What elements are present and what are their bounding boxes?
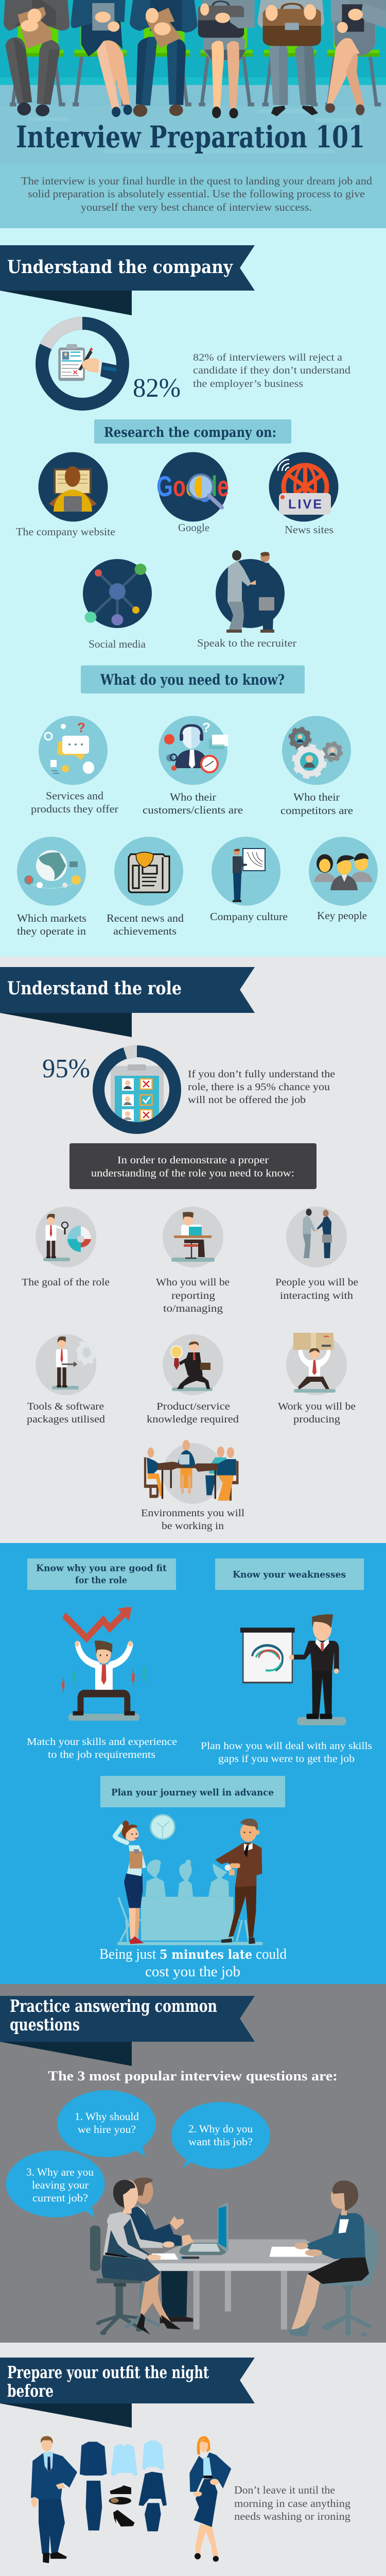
tip text: needs washing or ironing: [234, 2510, 351, 2522]
callout: five minutes late: [99, 1946, 287, 1980]
stat description: [193, 352, 350, 389]
speech bubble: question 1: we hire you?: [78, 2123, 136, 2136]
research item: news sites: [269, 452, 339, 536]
women's jacket: [138, 2472, 167, 2506]
stat: 82%: 82%: [133, 374, 181, 403]
knowledge item: customers and clients: customers/clients are: [143, 804, 243, 816]
research item: social media: Social media: [89, 638, 146, 650]
role item: environments: [141, 1440, 244, 1532]
man in suit: [31, 2436, 77, 2563]
skirt: [145, 2503, 161, 2531]
role item: who you report to: reporting: [171, 1290, 215, 1301]
callout: five minutes late: Being just 5 minutes late could: [99, 1946, 287, 1962]
trousers: [86, 2481, 102, 2531]
icon: handshake: [303, 1209, 332, 1258]
banner heading: practice answering: [0, 1996, 255, 2066]
knowledge item: services and products: [31, 716, 118, 815]
donut chart: 95%: [99, 1051, 175, 1128]
icon: candidate checklist: [111, 1064, 164, 1128]
panel: prepare your outfit: [0, 2343, 386, 2576]
stat description: will not be offered the job: [188, 1094, 306, 1106]
men's shoes: [109, 2485, 131, 2504]
tip text: skills gaps: gaps if you were to get the job: [218, 1753, 355, 1765]
knowledge item: company culture: [210, 837, 288, 923]
stat: 95%: 95%: [42, 1054, 90, 1083]
research item: the company website: [16, 452, 115, 538]
stat description: role, there is a 95% chance you: [188, 1081, 330, 1093]
role item: who you report to: to/managing: [163, 1303, 223, 1314]
shirt one: [111, 2444, 137, 2476]
illustration: man presenting chart: [240, 1614, 346, 1725]
banner heading: understand the company: Understand the company: [7, 257, 233, 278]
illustration: late for interview: [115, 1815, 263, 1945]
heading: research the company on: Research the company on:: [104, 425, 276, 440]
panel: intro: [0, 164, 386, 228]
role item: tools and software: packages utilised: [27, 1414, 105, 1425]
callout box: In order to demonstrate a proper: [117, 1155, 269, 1166]
donut chart: 82%: [42, 324, 122, 404]
banner heading: understand the role: [0, 967, 255, 1037]
illustration: business outfits: [31, 2436, 231, 2563]
role item: work you will produce: Work you will be: [278, 1401, 356, 1412]
speech bubble: question 2: want this job?: [188, 2136, 253, 2148]
knowledge item: customers and clients: [143, 716, 243, 816]
banner heading: prepare your outfit: Prepare your outfit the night: [7, 2362, 209, 2382]
role item: environments: be working in: [162, 1520, 224, 1532]
role item: tools and software: [27, 1334, 105, 1425]
banner heading: prepare your outfit: [0, 2358, 255, 2428]
heading: what do you need to know: What do you need to know?: [100, 671, 285, 688]
illustration: interview at table: [90, 2178, 378, 2336]
jacket: [80, 2442, 107, 2476]
role item: work you will produce: [278, 1333, 356, 1425]
icon: clipboard and hand: [58, 344, 117, 381]
role item: product and service knowledge: knowledge required: [147, 1414, 239, 1425]
heading: research the company on: [94, 419, 291, 444]
tip text: Don’t leave it until the: [234, 2484, 335, 2496]
knowledge item: recent news: [107, 837, 184, 937]
research item: social media: [83, 559, 152, 650]
stat description: candidate if they don’t understand: [193, 365, 350, 376]
knowledge item: recent news: Recent news and: [107, 912, 184, 924]
speech bubble: question 3: leaving your: [32, 2179, 89, 2191]
knowledge item: markets: [17, 837, 86, 937]
role item: product and service knowledge: Product/service: [156, 1401, 230, 1412]
illustration: six candidates seated on chairs: [4, 0, 386, 118]
panel: preparation tips: [0, 1543, 386, 1984]
role item: environments: Environments you will: [141, 1507, 244, 1519]
role item: the goal of the role: The goal of the role: [22, 1277, 110, 1288]
role item: tools and software: Tools & software: [27, 1401, 104, 1412]
intro text: yourself the very best chance of interview success.: [81, 201, 312, 213]
role item: people you will interact with: [275, 1207, 358, 1301]
knowledge item: key people: [309, 837, 378, 922]
research item: google: [156, 452, 229, 534]
research item: news sites: News sites: [285, 523, 334, 536]
knowledge item: competitors: competitors are: [280, 804, 353, 817]
intro text: [21, 175, 373, 213]
stat description: the employer’s business: [193, 378, 303, 389]
knowledge item: services and products: Services and: [46, 789, 104, 802]
tip text: match skills: Match your skills and experience: [27, 1736, 177, 1748]
knowledge item: recent news: achievements: [113, 925, 177, 937]
research item: speak to the recruiter: Speak to the recruiter: [197, 637, 296, 649]
knowledge item: competitors: Who their: [293, 791, 340, 803]
role item: the goal of the role: [22, 1207, 110, 1288]
knowledge item: services and products: ?: [77, 720, 85, 735]
role item: who you report to: Who you will be: [156, 1277, 230, 1288]
knowledge item: markets: Which markets: [17, 912, 86, 924]
tip text: morning in case anything: [234, 2497, 351, 2510]
tip text: skills gaps: [201, 1740, 372, 1765]
role item: work you will produce: producing: [293, 1414, 340, 1425]
speech bubble: question 3: current job?: [32, 2192, 88, 2204]
knowledge item: customers and clients: ?: [202, 720, 210, 735]
role item: who you report to: [156, 1207, 230, 1314]
research item: speak to the recruiter: [197, 550, 296, 649]
research item: the company website: The company website: [16, 526, 115, 538]
woman in suit: [189, 2436, 231, 2562]
stat description: If you don’t fully understand the: [188, 1069, 335, 1080]
panel: understand the company: [0, 228, 386, 957]
role item: product and service knowledge: [147, 1334, 239, 1425]
banner heading: understand the company: [0, 245, 255, 315]
panel: hero: [0, 0, 386, 165]
heading: three most popular questions: The 3 most popular interview questions are:: [48, 2069, 338, 2083]
tip text: [234, 2484, 351, 2522]
speech bubble: question 1: [57, 2090, 156, 2157]
knowledge item: customers and clients: Who their: [170, 791, 216, 803]
heading: know why you are good fit: Know why you are good fit: [36, 1563, 167, 1573]
shirt two: [142, 2441, 164, 2470]
heading: know why you are good fit: for the role: [75, 1575, 127, 1586]
research item: google: Google: [178, 521, 209, 534]
icon: handshake: [226, 550, 274, 633]
speech bubble: question 1: 1. Why should: [75, 2110, 139, 2123]
illustration: man with rising arrow: [62, 1607, 145, 1721]
banner heading: prepare your outfit: before: [7, 2381, 54, 2401]
speech bubble: question 2: [171, 2102, 270, 2169]
icon: team meeting: [145, 1440, 237, 1501]
panel: practice answering questions: [0, 1984, 386, 2343]
tip text: match skills: [27, 1736, 177, 1760]
role item: people you will interact with: People you will be: [275, 1277, 358, 1288]
knowledge item: company culture: Company culture: [210, 910, 288, 923]
intro text: solid preparation is absolutely essential. Use the following process to give: [28, 188, 365, 200]
callout box: understanding of the role you need to know:: [91, 1167, 294, 1179]
heading: know your weaknesses: Know your weaknesses: [233, 1569, 346, 1580]
heading: know why you are good fit: [27, 1558, 176, 1590]
callout: five minutes late: cost you the job: [145, 1963, 240, 1980]
speech bubble: question 2: 2. Why do you: [188, 2123, 253, 2135]
heading: what do you need to know: [81, 666, 305, 693]
intro text: The interview is your final hurdle in the quest to landing your dream job and: [21, 175, 373, 187]
role item: people you will interact with: interacting with: [280, 1290, 353, 1301]
heels: [113, 2510, 135, 2527]
knowledge item: key people: Key people: [317, 909, 367, 922]
stat description: [188, 1069, 335, 1106]
banner heading: practice answering: questions: [10, 2014, 80, 2035]
banner heading: practice answering: Practice answering common: [10, 1996, 217, 2016]
tip text: match skills: to the job requirements: [48, 1749, 155, 1760]
callout box: [69, 1143, 317, 1189]
research item: google: Google: [156, 470, 229, 502]
banner heading: understand the role: Understand the role: [7, 978, 182, 999]
speech bubble: question 3: 3. Why are you: [26, 2166, 94, 2178]
stat description: 82% of interviewers will reject a: [193, 352, 342, 363]
panel: understand the role: [0, 957, 386, 1543]
heading: plan your journey: [100, 1776, 285, 1807]
knowledge item: markets: they operate in: [17, 925, 86, 937]
knowledge item: competitors: [280, 716, 353, 817]
heading: plan your journey: Plan your journey well in advance: [111, 1787, 274, 1798]
speech bubble: question 3: [6, 2150, 105, 2217]
tip text: skills gaps: Plan how you will deal with any skills: [201, 1740, 372, 1752]
heading: know your weaknesses: [215, 1558, 364, 1590]
knowledge item: services and products: products they offer: [31, 803, 118, 815]
research item: news sites: LIVE: [288, 497, 322, 512]
